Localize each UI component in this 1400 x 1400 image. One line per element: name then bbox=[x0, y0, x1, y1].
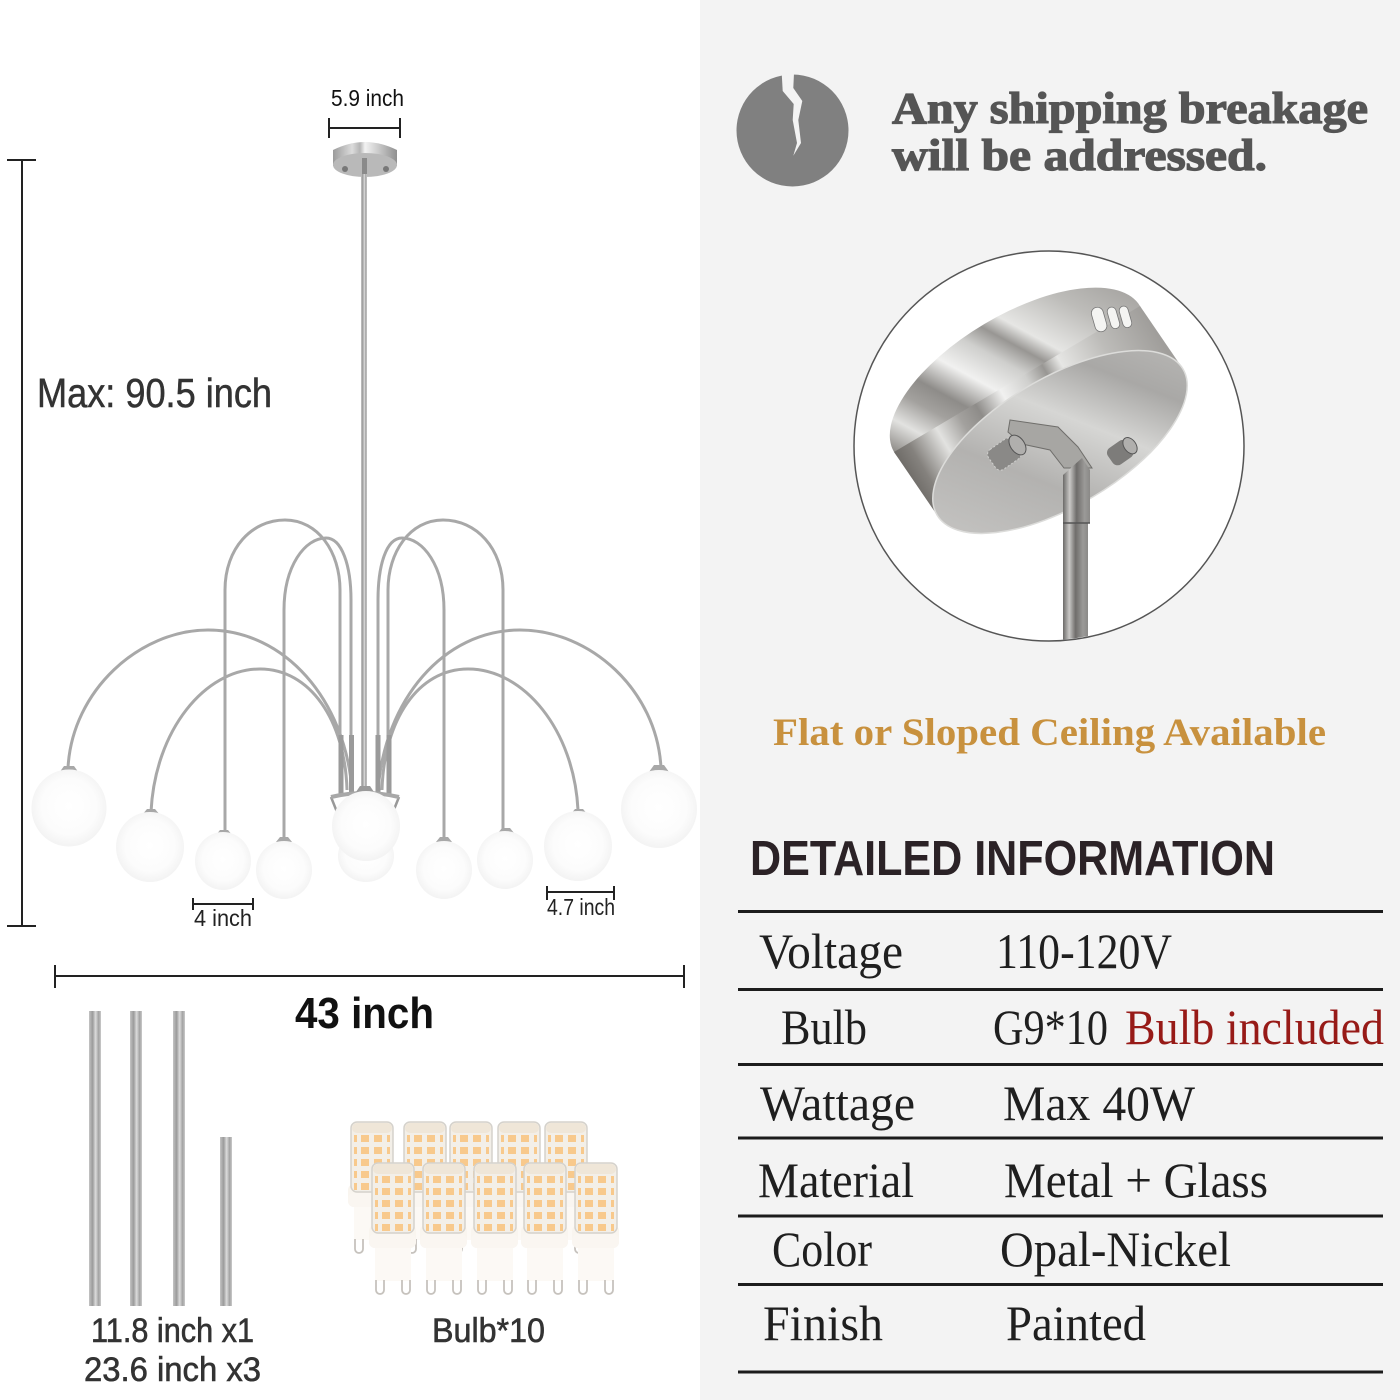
label: rod lengths bbox=[84, 1312, 261, 1389]
label: bulb count: Bulb*10 bbox=[432, 1312, 545, 1350]
heading: shipping breakage bbox=[892, 84, 1368, 180]
wide arches bbox=[68, 630, 661, 812]
row: voltage: 110-120V bbox=[996, 923, 1172, 979]
dimension: width bbox=[55, 965, 684, 988]
row: finish: Finish bbox=[763, 1295, 883, 1351]
row: material: Metal + Glass bbox=[1004, 1152, 1268, 1208]
dimension: height bbox=[7, 160, 36, 926]
mounting bracket bbox=[1008, 420, 1092, 468]
label: maximum height: Max: 90.5 inch bbox=[37, 370, 272, 416]
screw right bbox=[1107, 437, 1138, 466]
tall arches bbox=[225, 520, 503, 838]
dimension: small globe 4 inch: 4 inch bbox=[194, 905, 252, 931]
row: bulb: Bulb included bbox=[1125, 999, 1384, 1055]
row: finish: Painted bbox=[1006, 1295, 1146, 1351]
canopy face bbox=[932, 350, 1188, 534]
extension rods bbox=[89, 1011, 232, 1306]
heading: shipping breakage: will be addressed. bbox=[892, 131, 1267, 180]
dimension: canopy width 5.9 inch: 5.9 inch bbox=[331, 85, 404, 111]
heading: shipping breakage: Any shipping breakage bbox=[892, 84, 1368, 133]
row: wattage: Wattage bbox=[760, 1075, 915, 1131]
label: overall width: 43 inch bbox=[295, 989, 434, 1038]
row: wattage bbox=[760, 1075, 1196, 1131]
canopy side wall bbox=[890, 288, 1178, 512]
row: material: Material bbox=[758, 1152, 914, 1208]
row: wattage: Max 40W bbox=[1003, 1075, 1196, 1131]
label: rod lengths: 11.8 inch x1 bbox=[91, 1312, 254, 1350]
globes bbox=[32, 765, 697, 899]
circular detail photo: sloped canopy bbox=[854, 251, 1244, 643]
label: rod lengths: 23.6 inch x3 bbox=[84, 1351, 261, 1389]
chandelier illustration bbox=[32, 142, 697, 899]
canopy bbox=[333, 142, 397, 177]
row: bulb: G9*10 bbox=[993, 999, 1108, 1055]
row: bulb bbox=[781, 999, 1384, 1055]
pole bbox=[1063, 458, 1090, 643]
dimension: large globe 4.7 inch bbox=[547, 886, 615, 920]
row: color bbox=[772, 1221, 1231, 1277]
dimension: large globe 4.7 inch: 4.7 inch bbox=[547, 894, 615, 920]
hub bbox=[331, 735, 399, 812]
bulbs set bbox=[348, 1122, 619, 1294]
dimension: canopy width 5.9 inch bbox=[329, 85, 404, 138]
row: finish bbox=[763, 1295, 1146, 1351]
caption: ceiling type: Flat or Sloped Ceiling Available bbox=[773, 711, 1326, 754]
row: color: Opal-Nickel bbox=[1000, 1221, 1231, 1277]
row: color: Color bbox=[772, 1221, 872, 1277]
row: material bbox=[758, 1152, 1268, 1208]
screw left bbox=[987, 434, 1026, 471]
heading: detailed information: DETAILED INFORMATION bbox=[750, 832, 1275, 886]
stem bbox=[361, 174, 367, 794]
row: voltage bbox=[759, 923, 1172, 979]
row: bulb: Bulb bbox=[781, 999, 867, 1055]
row: voltage: Voltage bbox=[759, 923, 903, 979]
specification table bbox=[738, 912, 1384, 1372]
icon: cracked circle bbox=[736, 73, 848, 186]
